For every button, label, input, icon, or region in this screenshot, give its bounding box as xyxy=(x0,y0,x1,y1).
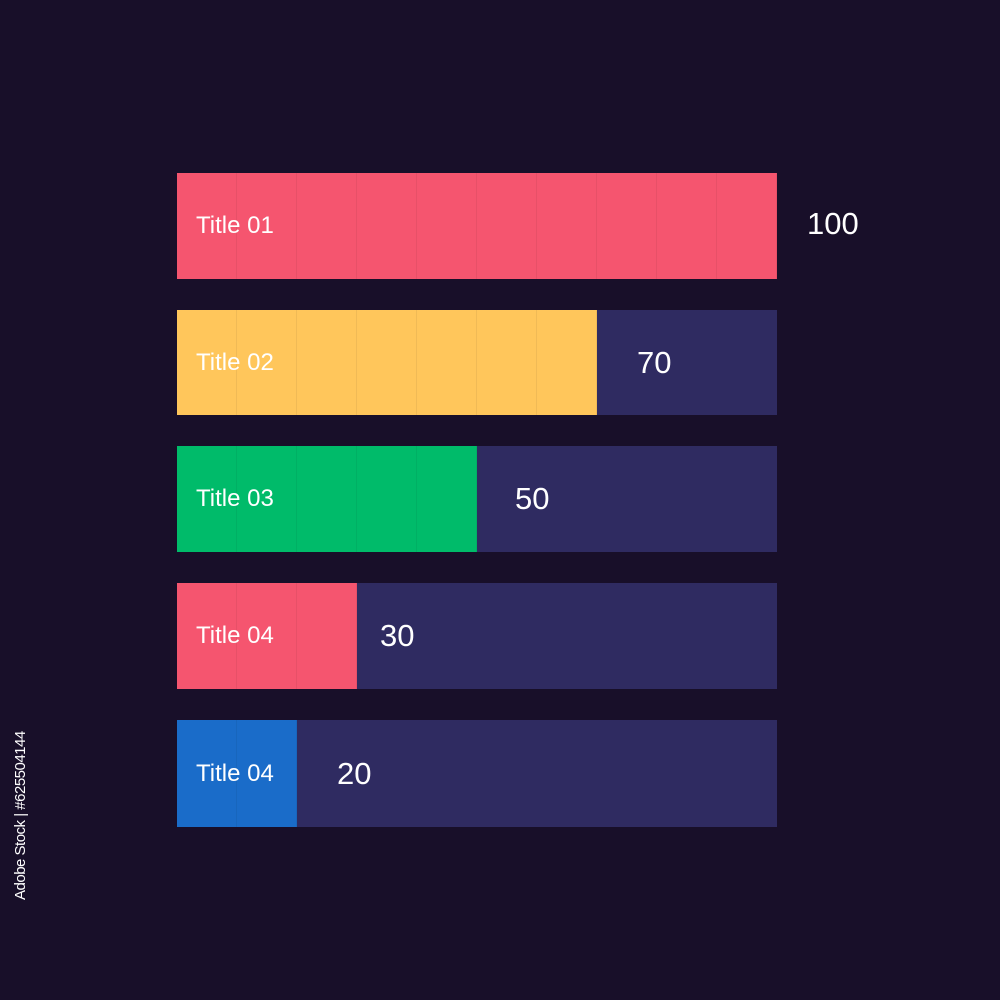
value 20: 20 xyxy=(337,756,371,790)
value 30: 30 xyxy=(380,618,414,653)
fill 03 xyxy=(177,446,477,552)
label 02: Title 02 xyxy=(196,348,274,376)
value 70: 70 xyxy=(637,344,671,380)
bar: Title 02 xyxy=(177,310,777,415)
label 04: Title 04 xyxy=(196,622,274,649)
fill 01 xyxy=(177,173,777,279)
label 03: Title 03 xyxy=(196,485,274,512)
fill 05 xyxy=(177,720,297,827)
label 01: Title 01 xyxy=(196,212,274,239)
fill 04 xyxy=(177,583,357,689)
side credit text: Adobe Stock | #625504144 xyxy=(12,731,29,900)
bar: Title 04 xyxy=(177,583,777,689)
label 05: Title 04 xyxy=(196,760,274,786)
value 100: 100 xyxy=(807,206,859,241)
bar: Title 03 xyxy=(177,446,777,552)
bar: Title 01 xyxy=(177,173,777,279)
value 50: 50 xyxy=(515,481,549,516)
bar: Title 04 blue xyxy=(177,720,777,827)
fill 02 xyxy=(177,310,597,415)
